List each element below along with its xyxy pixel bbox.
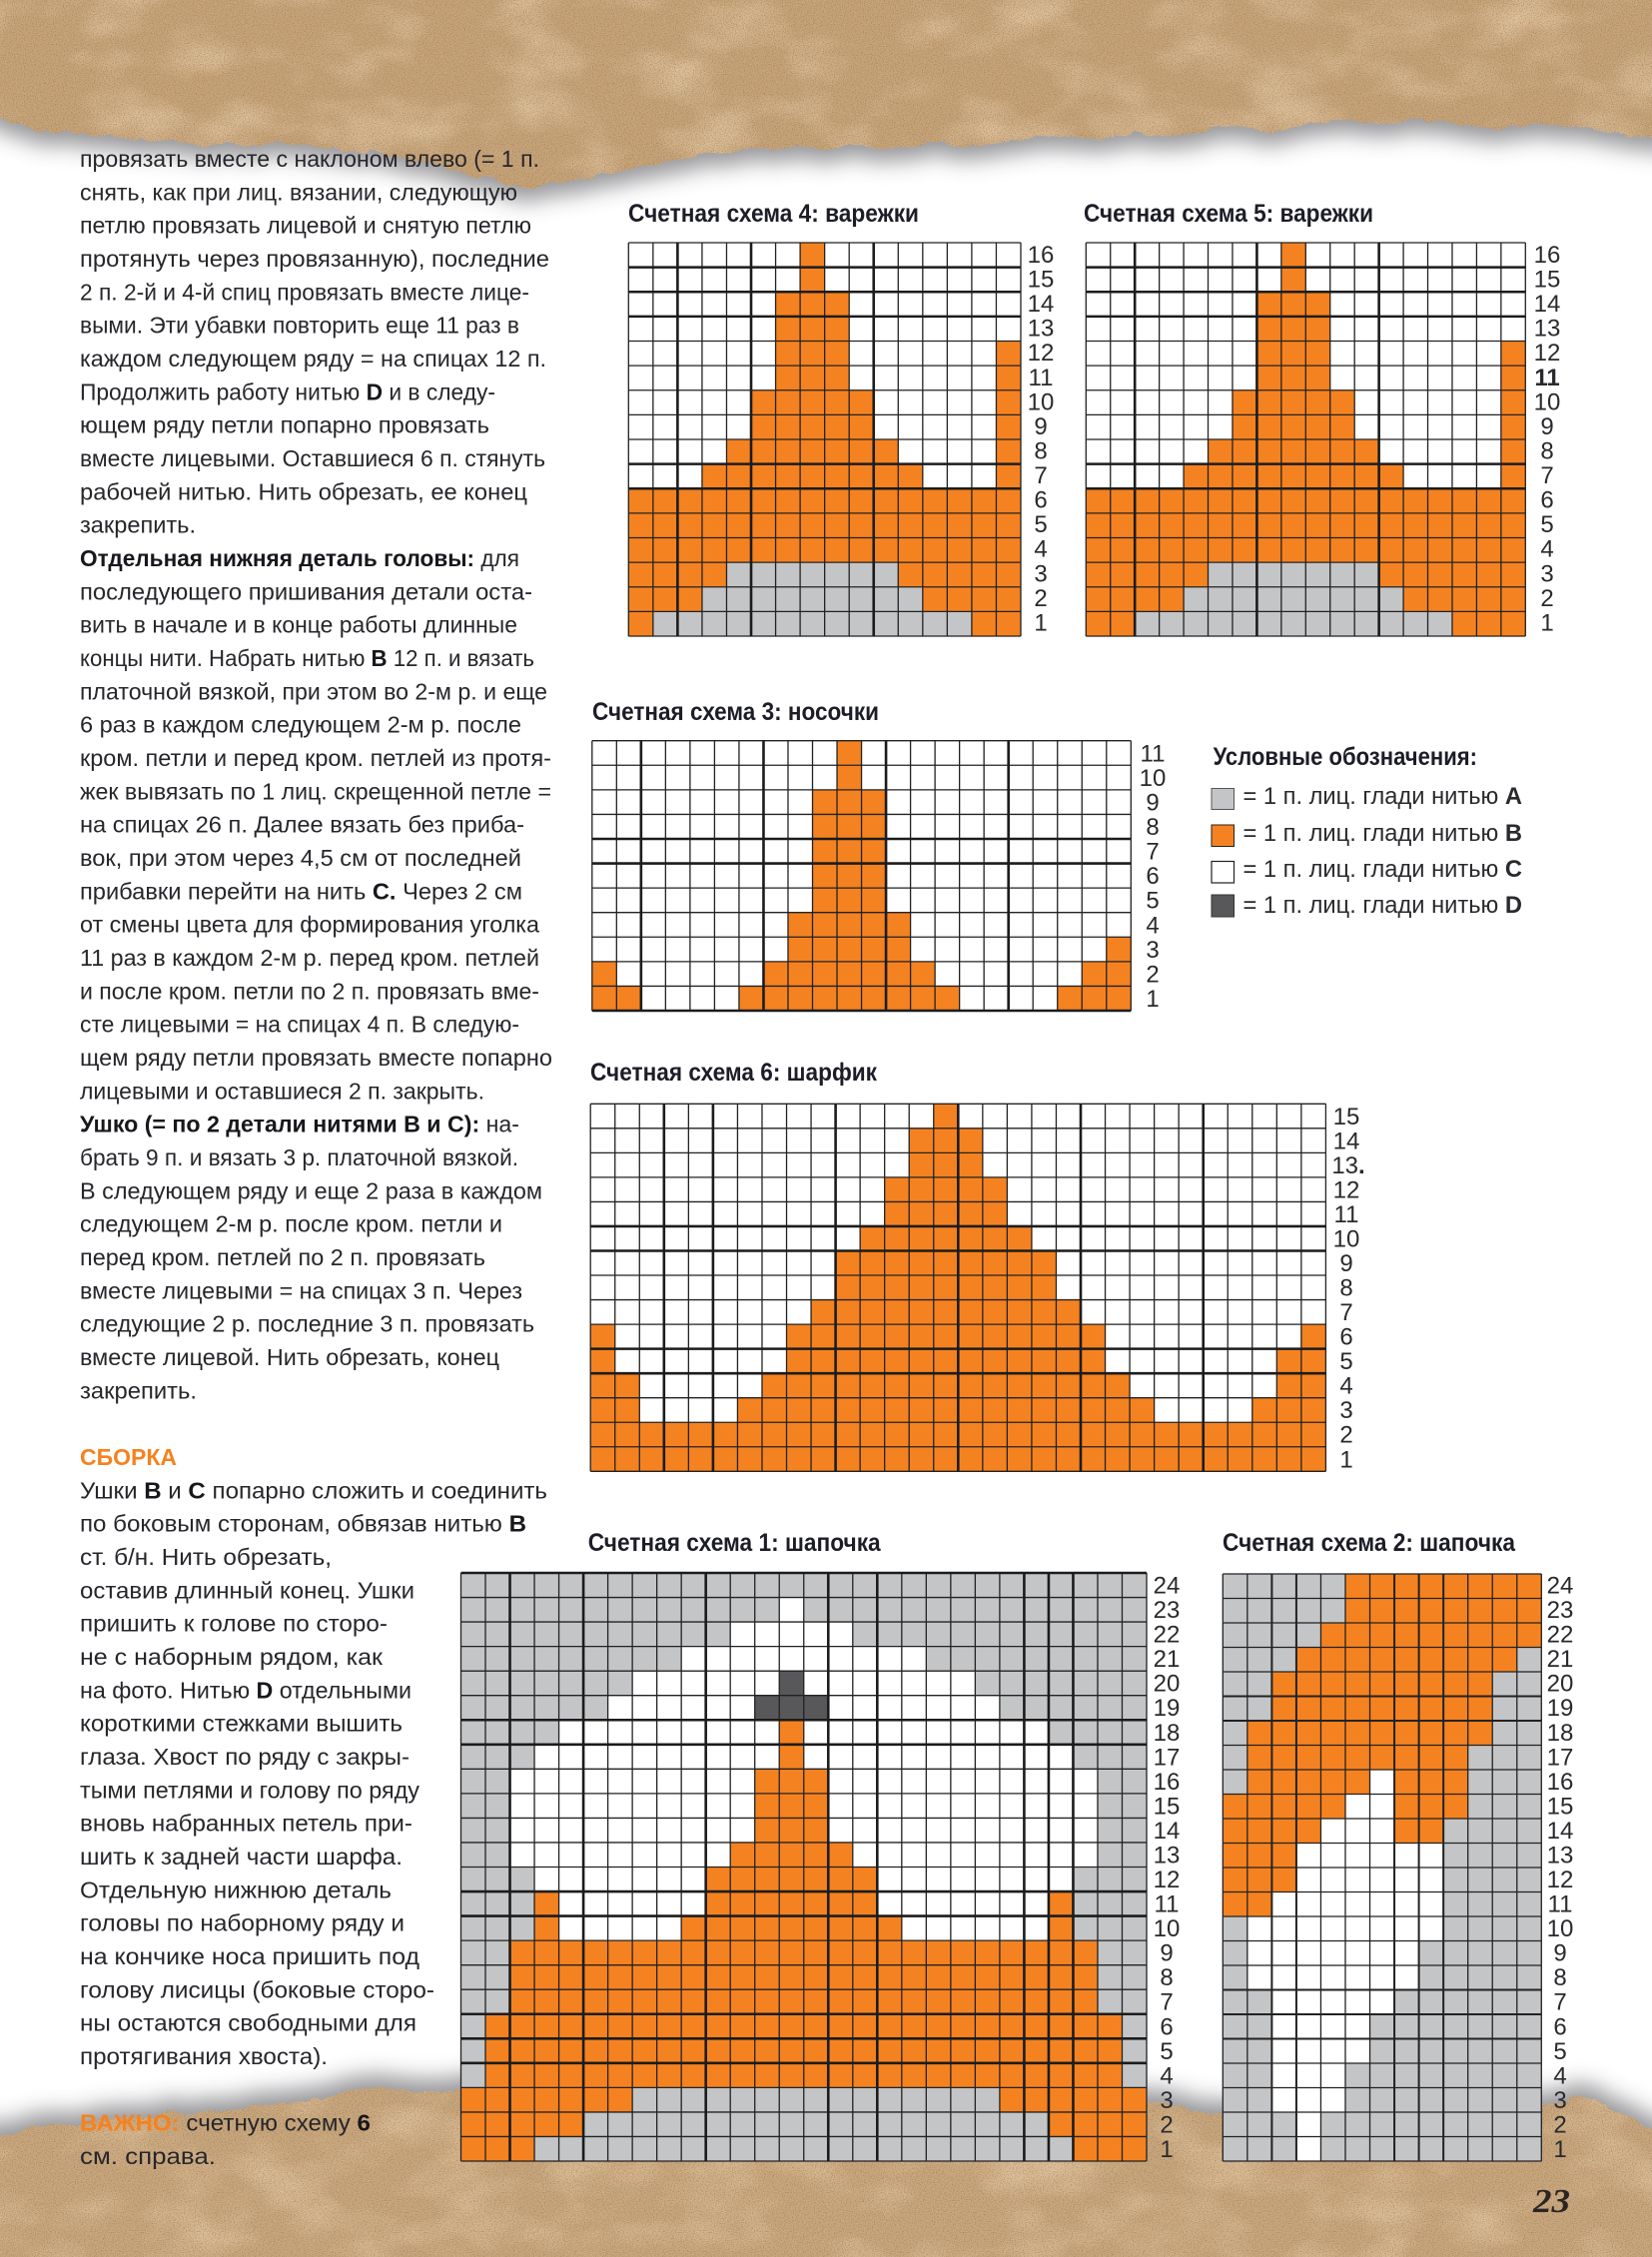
text block: assembly: шить к задней части шарфа. xyxy=(80,1844,403,1870)
grid: chart 1 xyxy=(459,1572,1148,2162)
row numbers: chart 2: 12 xyxy=(1547,1867,1573,1893)
row numbers: chart 2: 24 xyxy=(1547,1572,1573,1600)
row numbers: chart 2: 3 xyxy=(1553,2087,1567,2114)
row numbers: chart 5: 11 xyxy=(1534,365,1560,391)
row numbers: chart 1: 2 xyxy=(1160,2111,1174,2138)
text block: assembly: вновь набранных петель при- xyxy=(80,1811,413,1837)
row numbers: chart 1: 11 xyxy=(1155,1891,1179,1918)
callout: important note: ВАЖНО: счетную схему 6 xyxy=(80,2110,371,2136)
row numbers: chart 1: 17 xyxy=(1154,1744,1180,1771)
text block: instructions continued: петлю провязать лицевой и снятую петлю xyxy=(80,213,531,239)
row numbers: chart 4: 9 xyxy=(1034,413,1048,440)
row numbers: chart 4: 13 xyxy=(1028,316,1054,343)
row numbers: chart 1: 13 xyxy=(1154,1842,1180,1870)
row numbers: chart 2: 5 xyxy=(1553,2038,1567,2065)
text block: assembly: пришить к голове по сторо- xyxy=(80,1611,388,1637)
row numbers: chart 5: 16 xyxy=(1534,242,1560,269)
row numbers: chart 5: 10 xyxy=(1534,388,1560,415)
row numbers: chart 1: 20 xyxy=(1154,1671,1180,1698)
text block: separate lower head piece: жек вывязать по 1 лиц. скрещенной петле = xyxy=(80,778,551,804)
text block: separate lower head piece xyxy=(80,545,552,1104)
row numbers: chart 4: 16 xyxy=(1028,242,1054,269)
row numbers: chart 5: 5 xyxy=(1540,511,1554,538)
row numbers: chart 2: 22 xyxy=(1547,1622,1573,1649)
row numbers: chart 1: 1 xyxy=(1160,2136,1174,2163)
text block: ear xyxy=(80,1112,542,1403)
grid: chart 4 xyxy=(627,242,1022,637)
row numbers: chart 4: 4 xyxy=(1034,536,1048,563)
chart 6: scarf xyxy=(590,1059,1365,1473)
heading: chart 2: Счетная схема 2: шапочка xyxy=(1223,1529,1516,1557)
row numbers: chart 4: 3 xyxy=(1034,560,1048,587)
text block: assembly: на кончике носа пришить под xyxy=(80,1943,419,1969)
text block: ear: Ушко (= по 2 детали нитями В и С): на- xyxy=(80,1112,519,1137)
row numbers: chart 4: 15 xyxy=(1028,267,1054,294)
row numbers: chart 5: 8 xyxy=(1540,437,1554,465)
chart 4: mittens xyxy=(628,200,1054,636)
row numbers: chart 2: 10 xyxy=(1547,1915,1573,1942)
text block: separate lower head piece: концы нити. Набрать нитью В 12 п. и вязать xyxy=(80,645,534,671)
row numbers: chart 5: 12 xyxy=(1534,340,1560,367)
row numbers: chart 5: 13 xyxy=(1534,316,1560,343)
torn kraft paper: bottom xyxy=(0,2074,1652,2257)
torn kraft paper: top xyxy=(0,0,1652,203)
heading: chart 4: Счетная схема 4: варежки xyxy=(628,200,919,228)
row numbers: chart 2: 9 xyxy=(1553,1940,1567,1967)
row numbers: chart 2: 19 xyxy=(1547,1695,1573,1722)
row numbers: chart 4: 7 xyxy=(1034,462,1048,489)
text block: instructions continued: провязать вместе с наклоном влево (= 1 п. xyxy=(80,146,539,172)
text block: assembly: протягивания хвоста). xyxy=(80,2043,328,2069)
text block: instructions continued: закрепить. xyxy=(80,512,196,538)
text block: separate lower head piece: Отдельная нижняя деталь головы: для xyxy=(80,545,519,571)
legend title: Условные обозначения: xyxy=(1214,743,1477,771)
row numbers: chart 6: 6 xyxy=(1339,1324,1353,1351)
row numbers: chart 6: 2 xyxy=(1339,1422,1353,1449)
row numbers: chart 6: 1 xyxy=(1339,1446,1353,1473)
row numbers: chart 2: 17 xyxy=(1547,1744,1573,1771)
row numbers: chart 3: 9 xyxy=(1146,789,1160,816)
text block: separate lower head piece: сте лицевыми = на спицах 4 п. В следую- xyxy=(80,1012,519,1038)
legend xyxy=(1212,743,1522,919)
row numbers: chart 6: 11 xyxy=(1334,1201,1358,1228)
row numbers: chart 2: 4 xyxy=(1553,2062,1567,2089)
text block: assembly: оставив длинный конец. Ушки xyxy=(80,1577,414,1603)
row numbers: chart 4: 12 xyxy=(1028,340,1054,367)
row numbers: chart 1: 14 xyxy=(1154,1818,1180,1845)
row numbers: chart 3: 11 xyxy=(1141,740,1165,767)
legend item: yarn D: = 1 п. лиц. глади нитью D xyxy=(1242,892,1522,919)
row numbers: chart 5: 6 xyxy=(1540,487,1554,514)
chart 1: hat xyxy=(461,1529,1180,2163)
text block: assembly: по боковым сторонам, обвязав нитью В xyxy=(80,1511,526,1537)
heading: chart 1: Счетная схема 1: шапочка xyxy=(588,1529,882,1557)
row numbers: chart 3: 5 xyxy=(1146,888,1160,915)
text block: ear: следующем 2-м р. после кром. петли и xyxy=(80,1211,502,1237)
row numbers: chart 4: 14 xyxy=(1028,291,1054,318)
row numbers: chart 2: 2 xyxy=(1553,2111,1567,2138)
text block: assembly: ст. б/н. Нить обрезать, xyxy=(80,1544,332,1570)
row numbers: chart 2: 8 xyxy=(1553,1964,1567,1991)
row numbers: chart 2: 20 xyxy=(1547,1671,1573,1698)
row numbers: chart 5: 7 xyxy=(1540,462,1554,489)
row numbers: chart 6: 8 xyxy=(1339,1274,1353,1302)
text block: ear: закрепить. xyxy=(80,1377,197,1403)
row numbers: chart 1: 15 xyxy=(1154,1793,1180,1820)
text block: assembly: Отдельную нижнюю деталь xyxy=(80,1877,392,1902)
text block: instructions continued: 2 п. 2-й и 4-й спиц провязать вместе лице- xyxy=(80,279,529,305)
row numbers: chart 6: 12 xyxy=(1333,1176,1359,1203)
row numbers: chart 1: 7 xyxy=(1160,1989,1174,2016)
row numbers: chart 2: 15 xyxy=(1547,1793,1573,1820)
row numbers: chart 3: 7 xyxy=(1146,839,1160,866)
page number: 23 xyxy=(1532,2183,1570,2220)
text block: separate lower head piece: вок, при этом через 4,5 см от последней xyxy=(80,845,521,871)
text block: assembly xyxy=(80,1477,547,2069)
text block: assembly: Ушки В и С попарно сложить и соединить xyxy=(80,1477,547,1503)
text block: instructions continued: ющем ряду петли попарно провязать xyxy=(80,412,489,438)
row numbers: chart 4: 8 xyxy=(1034,437,1048,465)
grid: chart 5 xyxy=(1085,242,1526,637)
row numbers: chart 4: 2 xyxy=(1034,585,1048,612)
row numbers: chart 2: 7 xyxy=(1553,1989,1567,2016)
legend item: yarn A: = 1 п. лиц. глади нитью А xyxy=(1242,783,1522,810)
row numbers: chart 4: 11 xyxy=(1029,365,1053,391)
row numbers: chart 2: 11 xyxy=(1548,1891,1572,1918)
chart 3: socks xyxy=(592,698,1166,1013)
row numbers: chart 5: 3 xyxy=(1540,560,1554,587)
row numbers: chart 6: 15 xyxy=(1333,1104,1359,1130)
row numbers: chart 5: 2 xyxy=(1540,585,1554,612)
row numbers: chart 1: 18 xyxy=(1154,1720,1180,1747)
row numbers: chart 3: 1 xyxy=(1146,986,1160,1013)
row numbers: chart 1: 24 xyxy=(1154,1572,1180,1600)
row numbers: chart 1: 22 xyxy=(1154,1622,1180,1649)
row numbers: chart 4: 10 xyxy=(1028,388,1054,415)
text block: separate lower head piece: кром. петли и перед кром. петлей из протя- xyxy=(80,745,551,771)
text block: assembly: голову лисицы (боковые сторо- xyxy=(80,1976,434,2002)
row numbers: chart 2: 13 xyxy=(1547,1842,1573,1870)
row numbers: chart 3: 2 xyxy=(1146,961,1160,988)
text block: separate lower head piece: и после кром. петли по 2 п. провязать вме- xyxy=(80,978,539,1004)
text block: assembly: головы по наборному ряду и xyxy=(80,1910,405,1936)
row numbers: chart 2: 6 xyxy=(1553,2013,1567,2040)
text block: separate lower head piece: 11 раз в каждом 2-м р. перед кром. петлей xyxy=(80,945,539,971)
row numbers: chart 3: 3 xyxy=(1146,937,1160,964)
text block: ear: вместе лицевыми = на спицах 3 п. Через xyxy=(80,1277,522,1303)
row numbers: chart 2: 1 xyxy=(1553,2136,1567,2163)
text block: ear: В следующем ряду и еще 2 раза в каждом xyxy=(80,1177,542,1203)
row numbers: chart 5: 14 xyxy=(1534,291,1560,318)
text block: assembly: тыми петлями и голову по ряду xyxy=(80,1777,419,1803)
row numbers: chart 3: 8 xyxy=(1146,814,1160,841)
row numbers: chart 5: 15 xyxy=(1534,267,1560,294)
heading: chart 3: Счетная схема 3: носочки xyxy=(592,698,879,726)
row numbers: chart 1: 16 xyxy=(1154,1769,1180,1796)
text block: assembly: не с наборным рядом, как xyxy=(80,1644,384,1670)
row numbers: chart 1: 23 xyxy=(1154,1597,1180,1624)
grid: chart 6 xyxy=(589,1103,1326,1472)
text block: separate lower head piece: платочной вязкой, при этом во 2-м р. и еще xyxy=(80,678,547,704)
chart 2: hat xyxy=(1223,1529,1573,2163)
row numbers: chart 6: 4 xyxy=(1339,1373,1353,1400)
row numbers: chart 2: 23 xyxy=(1547,1597,1573,1624)
row numbers: chart 1: 6 xyxy=(1160,2013,1174,2040)
row numbers: chart 3: 10 xyxy=(1140,765,1166,792)
grid: chart 2 xyxy=(1223,1573,1542,2162)
text block: instructions continued: Продолжить работу нитью D и в следу- xyxy=(80,378,495,404)
row numbers: chart 1: 19 xyxy=(1154,1695,1180,1722)
row numbers: chart 1: 12 xyxy=(1154,1867,1180,1893)
heading: chart 6: Счетная схема 6: шарфик xyxy=(590,1059,877,1087)
row numbers: chart 2: 14 xyxy=(1547,1818,1573,1845)
text block: separate lower head piece: последующего пришивания детали оста- xyxy=(80,578,532,604)
heading: chart 5: Счетная схема 5: варежки xyxy=(1084,200,1373,228)
text block: separate lower head piece: прибавки перейти на нить С. Через 2 см xyxy=(80,878,522,904)
row numbers: chart 3: 4 xyxy=(1146,912,1160,939)
text block: ear: брать 9 п. и вязать 3 р. платочной вязкой. xyxy=(80,1144,518,1170)
text block: ear: перед кром. петлей по 2 п. провязать xyxy=(80,1244,485,1270)
text block: ear: вместе лицевой. Нить обрезать, конец xyxy=(80,1344,499,1370)
row numbers: chart 6: 7 xyxy=(1339,1299,1353,1326)
text block: instructions continued: снять, как при лиц. вязании, следующую xyxy=(80,179,517,205)
callout: important note: см. справа. xyxy=(80,2143,216,2169)
text block: ear: следующие 2 р. последние 3 п. провязать xyxy=(80,1311,534,1337)
text block: separate lower head piece: от смены цвета для формирования уголка xyxy=(80,912,540,938)
legend item: yarn C: = 1 п. лиц. глади нитью С xyxy=(1242,856,1522,883)
row numbers: chart 5: 1 xyxy=(1540,609,1554,636)
text block: assembly: короткими стежками вышить xyxy=(80,1711,403,1737)
row numbers: chart 4: 1 xyxy=(1034,609,1048,636)
text block: instructions continued xyxy=(80,146,549,538)
row numbers: chart 2: 16 xyxy=(1547,1769,1573,1796)
legend item: yarn B: = 1 п. лиц. глади нитью В xyxy=(1242,820,1522,847)
row numbers: chart 1: 9 xyxy=(1160,1940,1174,1967)
row numbers: chart 2: 18 xyxy=(1547,1720,1573,1747)
text block: instructions continued: вместе лицевыми. Оставшиеся 6 п. стянуть xyxy=(80,445,545,471)
row numbers: chart 6: 9 xyxy=(1339,1250,1353,1277)
row numbers: chart 6: 3 xyxy=(1339,1397,1353,1424)
grid: chart 3 xyxy=(591,740,1132,1013)
row numbers: chart 6: 13. xyxy=(1331,1152,1365,1179)
text block: assembly: глаза. Хвост по ряду с закры- xyxy=(80,1744,410,1770)
text block: assembly: на фото. Нитью D отдельными xyxy=(80,1677,412,1703)
row numbers: chart 1: 3 xyxy=(1160,2087,1174,2114)
text block: separate lower head piece: лицевыми и оставшиеся 2 п. закрыть. xyxy=(80,1078,484,1104)
row numbers: chart 6: 5 xyxy=(1339,1348,1353,1375)
text block: separate lower head piece: вить в начале и в конце работы длинные xyxy=(80,612,517,638)
text block: separate lower head piece: щем ряду петли провязать вместе попарно xyxy=(80,1045,552,1071)
row numbers: chart 4: 6 xyxy=(1034,487,1048,514)
heading: assembly: СБОРКА xyxy=(80,1444,177,1470)
row numbers: chart 1: 4 xyxy=(1160,2062,1174,2089)
row numbers: chart 2: 21 xyxy=(1547,1646,1573,1673)
row numbers: chart 1: 21 xyxy=(1154,1646,1180,1673)
row numbers: chart 3: 6 xyxy=(1146,863,1160,890)
row numbers: chart 4: 5 xyxy=(1034,511,1048,538)
text block: instructions continued: каждом следующем ряду = на спицах 12 п. xyxy=(80,346,546,372)
text block: instructions continued: выми. Эти убавки повторить еще 11 раз в xyxy=(80,313,519,339)
row numbers: chart 5: 9 xyxy=(1540,413,1554,440)
text block: instructions continued: рабочей нитью. Нить обрезать, ее конец xyxy=(80,478,527,504)
row numbers: chart 5: 4 xyxy=(1540,536,1554,563)
row numbers: chart 6: 14 xyxy=(1333,1128,1359,1154)
text block: separate lower head piece: на спицах 26 п. Далее вязать без приба- xyxy=(80,812,524,838)
text block: assembly: ны остаются свободными для xyxy=(80,2010,416,2036)
row numbers: chart 1: 8 xyxy=(1160,1964,1174,1991)
text block: instructions continued: протянуть через провязанную), последние xyxy=(80,246,549,272)
callout: important note xyxy=(80,2110,371,2169)
row numbers: chart 1: 10 xyxy=(1154,1915,1180,1942)
row numbers: chart 1: 5 xyxy=(1160,2038,1174,2065)
text block: separate lower head piece: 6 раз в каждом следующем 2-м р. после xyxy=(80,712,521,738)
chart 5: mittens xyxy=(1084,200,1560,636)
row numbers: chart 6: 10 xyxy=(1333,1226,1359,1252)
